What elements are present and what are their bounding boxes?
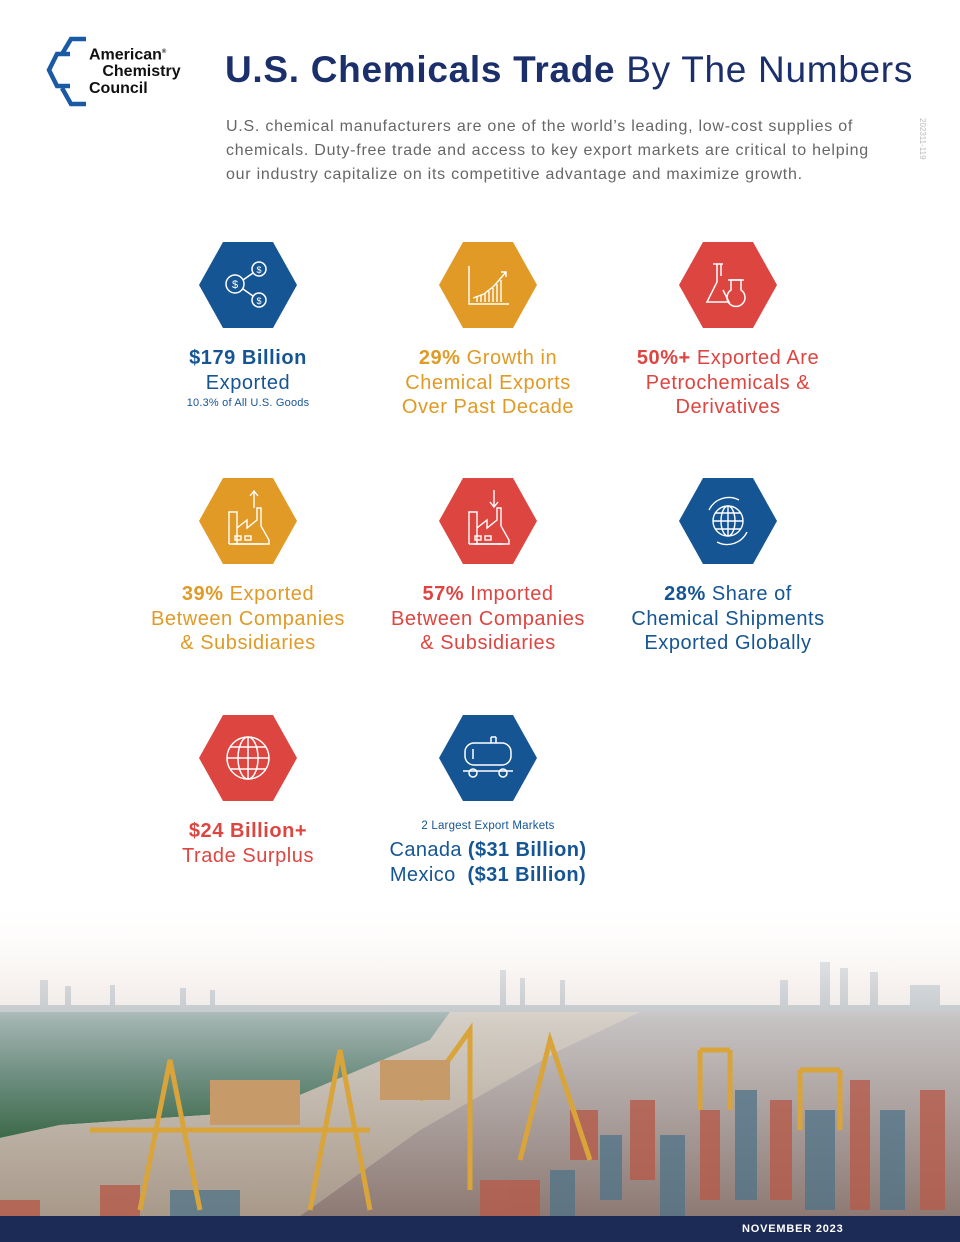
stat: 57% imported xyxy=(391,478,585,654)
stat: 57% imported: & Subsidiaries xyxy=(420,632,556,654)
icon: money network: $ xyxy=(232,279,238,291)
icon: globe xyxy=(199,715,297,801)
stat: 50%+ petrochemicals xyxy=(637,242,819,418)
icon: growth chart xyxy=(439,242,537,328)
stat: 39% exported xyxy=(151,478,345,654)
intro text: U.S. chemical manufacturers are one of the world’s leading, low-cost supplies of xyxy=(226,118,853,135)
logo: Chemistry xyxy=(102,63,181,80)
stat: 29% growth: Over Past Decade xyxy=(402,396,574,418)
icon: globe arrows xyxy=(679,478,777,564)
icon: factory export xyxy=(199,478,297,564)
document code: 202311-119 xyxy=(918,118,927,160)
intro text: chemicals. Duty-free trade and access to key export markets are critical to helping xyxy=(226,142,869,159)
stat: 28% share xyxy=(631,478,825,654)
title: U.S. Chemicals Trade By The Numbers xyxy=(225,49,913,90)
intro text xyxy=(226,118,869,183)
stat: 28% share: Chemical Shipments xyxy=(631,608,825,630)
logo xyxy=(46,36,181,106)
stat: 179 billion: Exported xyxy=(206,372,290,394)
stat: 29% growth: 29% Growth in xyxy=(419,347,557,369)
stat: 179 billion: 10.3% of All U.S. Goods xyxy=(187,397,309,409)
stat: 50%+ petrochemicals: Derivatives xyxy=(676,396,780,418)
icon: tank car xyxy=(439,715,537,801)
photo: port scene xyxy=(0,957,960,1216)
stat: 24 billion surplus: Trade Surplus xyxy=(182,844,314,866)
footer xyxy=(0,1216,960,1242)
stat: 57% imported: Between Companies xyxy=(391,608,585,630)
stat: 29% growth xyxy=(402,242,574,418)
logo: Council xyxy=(89,80,148,97)
icon: flasks xyxy=(679,242,777,328)
logo: American® xyxy=(89,46,166,63)
stat: export markets xyxy=(390,715,586,886)
stat: 24 billion surplus: $24 Billion+ xyxy=(189,820,307,842)
stat: export markets: Canada ($31 Billion) xyxy=(390,839,586,861)
stat: 39% exported: Between Companies xyxy=(151,608,345,630)
stat: export markets: Mexico ($31 Billion) xyxy=(390,864,586,886)
stat: 179 billion: $179 Billion xyxy=(189,347,307,369)
stat: 50%+ petrochemicals: 50%+ Exported Are xyxy=(637,347,819,369)
stat: 29% growth: Chemical Exports xyxy=(405,372,571,394)
stat: export markets: 2 Largest Export Markets xyxy=(421,820,555,832)
stat: 57% imported: 57% Imported xyxy=(422,583,554,605)
intro text: our industry capitalize on its competitive advantage and maximize growth. xyxy=(226,166,803,183)
stat: 24 billion surplus xyxy=(182,715,314,866)
stat: 28% share: 28% Share of xyxy=(664,583,792,605)
icon: factory import xyxy=(439,478,537,564)
icon: money network: $ xyxy=(256,296,262,306)
footer: NOVEMBER 2023 xyxy=(742,1223,844,1235)
icon: money network xyxy=(199,242,297,328)
stat: 28% share: Exported Globally xyxy=(644,632,812,654)
stat: 179 billion xyxy=(187,242,309,409)
stat: 39% exported: & Subsidiaries xyxy=(180,632,316,654)
stat: 50%+ petrochemicals: Petrochemicals & xyxy=(646,372,810,394)
icon: money network: $ xyxy=(256,265,262,275)
stat: 39% exported: 39% Exported xyxy=(182,583,314,605)
